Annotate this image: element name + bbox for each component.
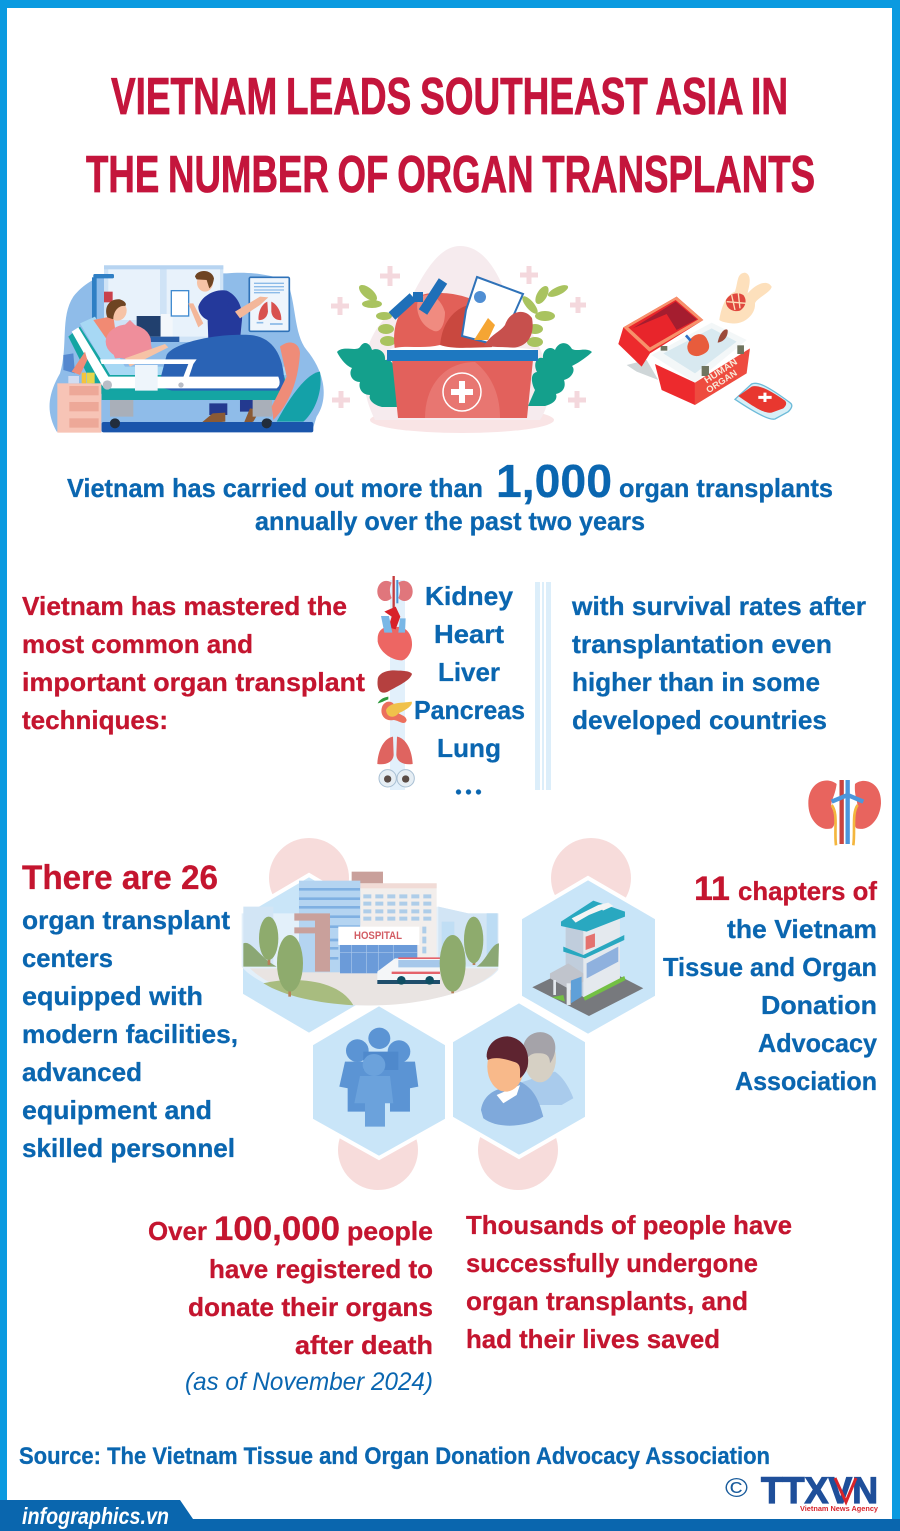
icons: organ column: [377, 576, 414, 790]
text: mastered techniques: Vietnam has mastered the: [22, 591, 347, 621]
sub: teal leaves: [337, 343, 592, 407]
sub: ambulance: [377, 957, 440, 985]
text: mastered techniques: [22, 591, 365, 735]
sub: green sprigs: [356, 282, 570, 347]
sub: blood bag: [735, 383, 792, 419]
sub: eyes: [379, 770, 414, 787]
text: survival rates: [571, 591, 866, 735]
illustration: human organ transport box: [618, 273, 792, 419]
text: 11 chapters: [663, 870, 878, 1096]
sub: heart and liver: [686, 329, 728, 356]
sub: basket with cross: [387, 350, 538, 418]
subtitle: 1,000: [496, 455, 612, 507]
text: 11 chapters: the Vietnam: [727, 914, 877, 944]
sub: bedside table: [57, 373, 101, 433]
text: survival rates: transplantation even: [572, 629, 832, 659]
illustration: patient in hospital bed with doctor: [50, 265, 324, 433]
sub: box body: ORGAN: [704, 368, 739, 395]
text: survival rates: higher than in some: [572, 667, 820, 697]
text: lives saved: Thousands of people have: [466, 1210, 792, 1240]
text: survival rates: developed countries: [572, 705, 827, 735]
subtitle: Vietnam has carried out more than: [67, 473, 483, 503]
text: 26 centers: organ transplant: [22, 905, 230, 935]
text: 100,000 registered: have registered to: [209, 1254, 433, 1284]
text: 26 centers: modern facilities,: [22, 1019, 238, 1049]
text: mastered techniques: important organ transplant: [22, 667, 365, 697]
sub: box body: HUMAN: [702, 357, 739, 385]
text: 11 chapters: Tissue and Organ: [663, 952, 877, 982]
text: survival rates: with survival rates after: [571, 591, 866, 621]
text: 100,000 registered: 100,000: [214, 1210, 340, 1248]
icon: group of people: [339, 1028, 418, 1127]
pink circles behind hexagons: [269, 838, 631, 1190]
text: lives saved: [466, 1210, 792, 1354]
illustration: medical basket with organs: [331, 246, 592, 433]
hexagon: building: [520, 878, 657, 1036]
icon: kidneys: [808, 780, 881, 845]
sub: heart: [378, 607, 412, 660]
hexagon: people: [311, 1004, 447, 1158]
icon: patients: [481, 1032, 573, 1126]
sub: doctor: [188, 271, 268, 424]
list: organ names: Heart: [434, 619, 504, 649]
sub: liver: [377, 670, 412, 693]
text: lives saved: successfully undergone: [466, 1248, 758, 1278]
sub: buildings: HOSPITAL: [354, 930, 402, 942]
sub: organs: [387, 277, 538, 354]
hexagon: patients: [451, 1001, 587, 1157]
sub: kidneys: [377, 576, 413, 610]
title: [86, 68, 815, 204]
sub: box body: [652, 323, 750, 405]
sub: bed and patient: [68, 299, 292, 429]
subtitle: organ transplants: [619, 473, 833, 503]
list: organ names: Pancreas: [414, 695, 525, 725]
text: 26 centers: skilled personnel: [22, 1133, 235, 1163]
text: 11 chapters: Advocacy: [758, 1028, 878, 1058]
text: 26 centers: equipment and: [22, 1095, 212, 1125]
text: lives saved: organ transplants, and: [466, 1286, 748, 1316]
text: mastered techniques: techniques:: [22, 705, 168, 735]
text: 100,000 registered: people: [347, 1216, 433, 1246]
logo: TTXVN: Vietnam News Agency: [800, 1506, 878, 1513]
sub: buildings: [294, 872, 437, 973]
text: 11 chapters: chapters of: [738, 876, 877, 906]
list: organ names: Liver: [438, 657, 500, 687]
text: mastered techniques: most common and: [22, 629, 253, 659]
decorative divider: [535, 582, 551, 790]
logo: TTXVN: TTXVN: [761, 1470, 878, 1511]
logo: TTXVN: ©: [725, 1473, 748, 1503]
text: 26 centers: There are 26: [22, 859, 218, 897]
text: 11 chapters: Donation: [761, 990, 877, 1020]
footer bar: [0, 1500, 900, 1531]
sub: plants: [63, 342, 321, 422]
sub: trees: [259, 917, 483, 997]
text: 26 centers: equipped with: [22, 981, 203, 1011]
list: organ names: Kidney: [425, 581, 514, 611]
sub: gloved hands holding organ: [719, 273, 772, 324]
text: 26 centers: centers: [22, 943, 113, 973]
text: 26 centers: [22, 859, 238, 1163]
text: 100,000 registered: [148, 1210, 433, 1396]
illustration: small hospital building: [532, 901, 643, 1016]
footer bar: infographics.vn: [22, 1503, 169, 1529]
illustration: hospital scene: [242, 872, 499, 1005]
sub: lungs: [377, 737, 413, 764]
text: 11 chapters: Association: [735, 1066, 877, 1096]
text: 26 centers: advanced: [22, 1057, 142, 1087]
hexagon: hospital: [241, 875, 377, 1035]
text: lives saved: had their lives saved: [466, 1324, 720, 1354]
list: organ names: Lung: [437, 733, 501, 763]
text: 100,000 registered: Over: [148, 1216, 207, 1246]
text: 100,000 registered: (as of November 2024): [185, 1368, 433, 1396]
sub: chart of lungs: [249, 277, 289, 331]
list: organ names: [414, 581, 525, 794]
subtitle: [67, 455, 833, 536]
source: Source: The Vietnam Tissue and Organ Donation Advocacy Association: [19, 1443, 770, 1470]
text: 100,000 registered: after death: [295, 1330, 433, 1360]
subtitle: annually over the past two years: [255, 506, 645, 536]
sub: open lid: [618, 297, 703, 367]
text: 11 chapters: 11: [694, 870, 730, 908]
sub: pancreas: [378, 697, 412, 723]
text: 100,000 registered: donate their organs: [188, 1292, 433, 1322]
